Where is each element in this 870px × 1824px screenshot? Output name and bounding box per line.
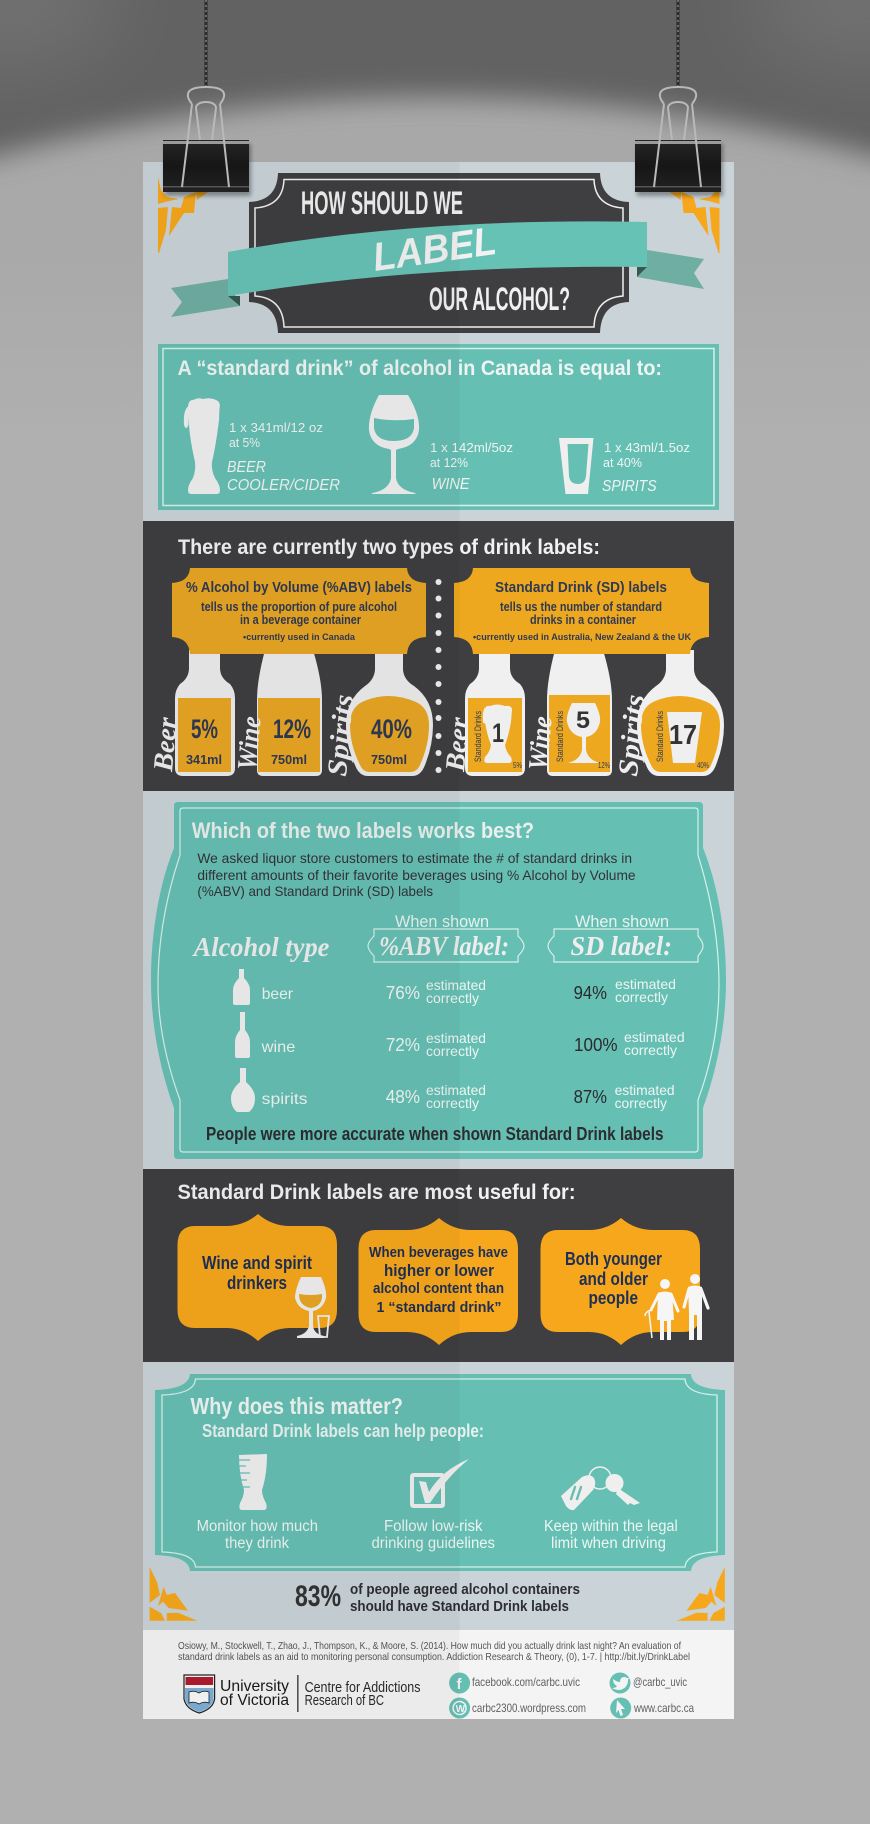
text: wine amount: at 12%: [430, 455, 468, 470]
text: guidelines: Follow low-risk: [384, 1518, 483, 1535]
row: beer: estimated: [615, 976, 676, 992]
icon: wordpress: W: [456, 1704, 466, 1715]
title: our alcohol: OUR ALCOHOL?: [429, 281, 570, 317]
text: beer amount: 1 x 341ml/12 oz: [229, 420, 323, 435]
column header: SD label: [548, 912, 703, 962]
row: beer: 76%: [386, 983, 420, 1003]
heading: Standard Drink labels are most useful for:: [178, 1181, 576, 1204]
logo: centre name: Research of BC: [305, 1693, 384, 1709]
text: wine amount: [430, 440, 513, 470]
label: SD spirits script: Spirits: [613, 693, 651, 778]
heading: A “standard drink” of alcohol in Canada is equal to:: [178, 357, 662, 380]
card: younger and older people: [540, 1218, 708, 1345]
logo: university shield: [184, 1675, 215, 1713]
card: younger and older people: Both younger: [565, 1249, 662, 1269]
plaque: SD labels: [454, 568, 709, 654]
row: wine: [235, 1012, 685, 1059]
panel: which label works best: [151, 802, 726, 1159]
heading: Which of the two labels works best?: [192, 818, 534, 843]
row: spirits: spirits: [262, 1091, 308, 1108]
icon: wine and shot: [295, 1277, 329, 1338]
row: beer: correctly: [615, 989, 668, 1005]
column header: SD label: When shown: [575, 912, 669, 931]
text: spirits amount: at 40%: [603, 455, 642, 470]
panel: two types of labels: [143, 521, 734, 791]
text: legal limit: Keep within the legal: [544, 1518, 678, 1535]
bottle: SD spirits: 17: [669, 719, 697, 750]
logo: university name: [220, 1678, 289, 1709]
logo divider: [297, 1675, 299, 1712]
ribbon tail left: [171, 279, 240, 317]
text: beer cooler cider: [227, 459, 340, 494]
bottle: ABV beer: 5%: [191, 714, 218, 744]
text: beer cooler cider: BEER: [227, 459, 266, 476]
column header: ABV label: %ABV label:: [379, 931, 509, 961]
plaque: ABV labels: [172, 568, 426, 654]
row: spirits: 87%: [574, 1087, 607, 1107]
title plaque: [249, 173, 629, 333]
row: wine: estimated: [426, 1030, 486, 1046]
callout: 83 percent: of people agreed alcohol containers: [350, 1581, 580, 1598]
citation: standard drink labels as an aid to monitoring personal consumption. Addiction Research & Theory, (0), 1-7. | http://bit.ly/DrinkLabel: [178, 1651, 690, 1663]
plaque: SD labels: tells us the number of standard: [500, 600, 662, 614]
row: beer: 94%: [574, 983, 607, 1003]
row: spirits: correctly: [615, 1095, 667, 1111]
text: guidelines: drinking guidelines: [372, 1535, 495, 1552]
bottle: ABV beer: 341ml: [186, 752, 222, 767]
text: guidelines: [372, 1518, 495, 1552]
callout: 83 percent: 83%: [295, 1580, 341, 1613]
icon: facebook: [449, 1672, 470, 1694]
row: wine: correctly: [426, 1043, 479, 1059]
icon: wine glass: [369, 395, 419, 494]
intro paragraph: (%ABV) and Standard Drink (SD) labels: [197, 883, 433, 899]
bottle: SD spirits: Standard Drinks: [655, 711, 665, 762]
bottle: SD wine: Standard Drinks: [555, 711, 565, 762]
text: monitor: they drink: [225, 1535, 289, 1552]
bottle: ABV wine: [257, 650, 322, 776]
row: wine: 72%: [386, 1035, 420, 1055]
bottle: ABV spirits: 750ml: [371, 752, 407, 767]
label: SD beer script: Beer: [440, 715, 476, 774]
row: beer: estimated: [426, 977, 486, 993]
card: higher or lower alcohol: higher or lower: [384, 1261, 494, 1280]
plaque: ABV labels: •currently used in Canada: [243, 632, 356, 643]
text: spirits amount: [603, 440, 690, 470]
plaque: ABV labels: in a beverage container: [240, 613, 361, 627]
label: wine script: Wine: [232, 715, 268, 772]
footer: [143, 1630, 734, 1719]
callout: 83 percent: should have Standard Drink labels: [350, 1598, 569, 1615]
text: website: www.carbc.ca: [633, 1701, 694, 1715]
citation: Osiowy, M., Stockwell, T., Zhao, J., Thompson, K., & Moore, S. (2014). How much did you actually drink last night? An evaluation of: [178, 1640, 681, 1652]
text: facebook: facebook.com/carbc.uvic: [472, 1675, 580, 1689]
ornament: top-right corner: [670, 177, 720, 253]
card: wine and spirit drinkers: drinkers: [227, 1273, 287, 1293]
plaque: ABV labels: tells us the proportion of pure alcohol: [201, 600, 397, 614]
title: label: LABEL: [370, 219, 499, 280]
intro paragraph: [197, 850, 636, 899]
icon: people: [645, 1274, 708, 1340]
column header: ABV label: [368, 912, 524, 962]
ribbon tail right: [637, 250, 704, 289]
icon: car keys: [561, 1467, 640, 1510]
plaque: ABV labels: % Alcohol by Volume (%ABV) labels: [186, 580, 412, 596]
binder clip right: [635, 0, 723, 196]
panel: why does this matter: [155, 1374, 725, 1571]
column header: ABV label: When shown: [395, 912, 489, 931]
text: wine amount: 1 x 142ml/5oz: [430, 440, 513, 455]
icon: twitter: [610, 1672, 630, 1694]
text: monitor: Monitor how much: [197, 1518, 318, 1535]
panel: standard drink definition: [158, 344, 719, 510]
card: wine and spirit drinkers: [178, 1214, 337, 1341]
label: spirits script: Spirits: [322, 693, 360, 778]
text: beer cooler cider: COOLER/CIDER: [227, 477, 340, 494]
text: beer amount: at 5%: [229, 435, 260, 450]
bottle: SD beer: 5%: [513, 761, 522, 770]
text: beer amount: [229, 420, 323, 450]
poster paper: [143, 162, 734, 1719]
card: wine and spirit drinkers: Wine and spirit: [202, 1253, 312, 1273]
icon: measured glass: [239, 1454, 267, 1510]
row: beer: beer: [262, 986, 294, 1003]
card: higher or lower alcohol: When beverages have: [369, 1244, 508, 1261]
logo: university name: of Victoria: [220, 1692, 289, 1709]
row: beer: [233, 969, 676, 1006]
text: monitor: [197, 1518, 318, 1552]
icon: facebook: f: [456, 1676, 462, 1693]
row: beer: correctly: [426, 990, 479, 1006]
callout: 83 percent: [295, 1580, 580, 1615]
ornament: top-left corner: [158, 177, 208, 253]
bottle: SD spirits: 40%: [697, 761, 709, 770]
plaque: SD labels: •currently used in Australia, New Zealand & the UK: [473, 632, 691, 643]
text: spirits: SPIRITS: [602, 478, 657, 495]
row: spirits: correctly: [426, 1095, 479, 1111]
ornament: bottom-right corner: [677, 1567, 725, 1621]
text: spirits amount: 1 x 43ml/1.5oz: [604, 440, 690, 455]
bottle: ABV spirits: 40%: [371, 714, 412, 744]
fold shading on the left half of the paper: [143, 162, 460, 1719]
bottle: SD beer: [465, 650, 525, 776]
ornament: bottom-left corner: [150, 1567, 197, 1621]
row: wine: correctly: [624, 1042, 677, 1058]
column header: SD label: SD label:: [570, 931, 672, 961]
heading: There are currently two types of drink labels:: [178, 536, 600, 559]
intro paragraph: different amounts of their favorite beverages using % Alcohol by Volume: [197, 867, 636, 883]
intro paragraph: We asked liquor store customers to estimate the # of standard drinks in: [197, 850, 632, 866]
column header: alcohol type: Alcohol type: [192, 932, 329, 962]
bottle: ABV beer: [175, 650, 235, 776]
label: beer script: Beer: [148, 715, 184, 774]
card: higher or lower alcohol: 1 “standard drink”: [376, 1299, 502, 1316]
icon: beer glass: [184, 398, 220, 494]
dotted divider: [436, 579, 442, 773]
row: wine: wine: [261, 1039, 296, 1056]
bottle: SD spirits: [637, 650, 724, 776]
logo: centre name: Centre for Addictions: [305, 1680, 420, 1696]
text: legal limit: limit when driving: [551, 1535, 666, 1552]
label: SD wine script: Wine: [523, 715, 559, 772]
heading: Why does this matter?: [190, 1393, 403, 1419]
title: how should we: HOW SHOULD WE: [301, 185, 463, 221]
row: spirits: estimated: [615, 1082, 675, 1098]
row: spirits: estimated: [426, 1082, 486, 1098]
subheading: Standard Drink labels can help people:: [202, 1421, 484, 1441]
text: wine: WINE: [432, 476, 470, 493]
bottle: ABV wine: 12%: [273, 714, 311, 744]
ribbon main with label word: [228, 219, 647, 296]
icon: wordpress: [449, 1698, 470, 1718]
binder clip left: [163, 0, 251, 196]
bottle: SD beer: Standard Drinks: [473, 711, 483, 762]
row: spirits: 48%: [386, 1087, 420, 1107]
card: younger and older people: people: [588, 1288, 638, 1308]
bottle: SD beer: 1: [492, 718, 504, 748]
citation: [178, 1640, 690, 1663]
card: higher or lower alcohol: [358, 1218, 518, 1345]
text: wordpress: carbc2300.wordpress.com: [472, 1701, 586, 1715]
panel: most useful for: [143, 1169, 734, 1362]
plaque: SD labels: Standard Drink (SD) labels: [495, 580, 667, 596]
row: spirits: [231, 1068, 675, 1112]
icon: shot glass: [559, 438, 594, 494]
text: twitter: @carbc_uvic: [633, 1675, 687, 1689]
card: younger and older people: and older: [579, 1269, 648, 1289]
bottle: ABV wine: 750ml: [271, 752, 307, 767]
bottle: SD wine: [547, 650, 612, 776]
card: higher or lower alcohol: alcohol content than: [373, 1280, 504, 1297]
plaque: SD labels: drinks in a container: [530, 613, 636, 627]
bottle: ABV spirits: [346, 650, 433, 776]
conclusion: People were more accurate when shown Standard Drink labels: [206, 1124, 664, 1144]
bottle: SD wine: 12%: [598, 761, 610, 770]
bottle: SD wine: 5: [576, 707, 590, 734]
icon: checkbox: [412, 1459, 469, 1506]
row: wine: estimated: [624, 1029, 685, 1045]
logo: centre name: [305, 1680, 420, 1709]
row: wine: 100%: [574, 1035, 618, 1055]
text: legal limit: [544, 1518, 678, 1552]
logo: university name: University: [220, 1678, 289, 1695]
icon: web cursor: [610, 1698, 631, 1718]
